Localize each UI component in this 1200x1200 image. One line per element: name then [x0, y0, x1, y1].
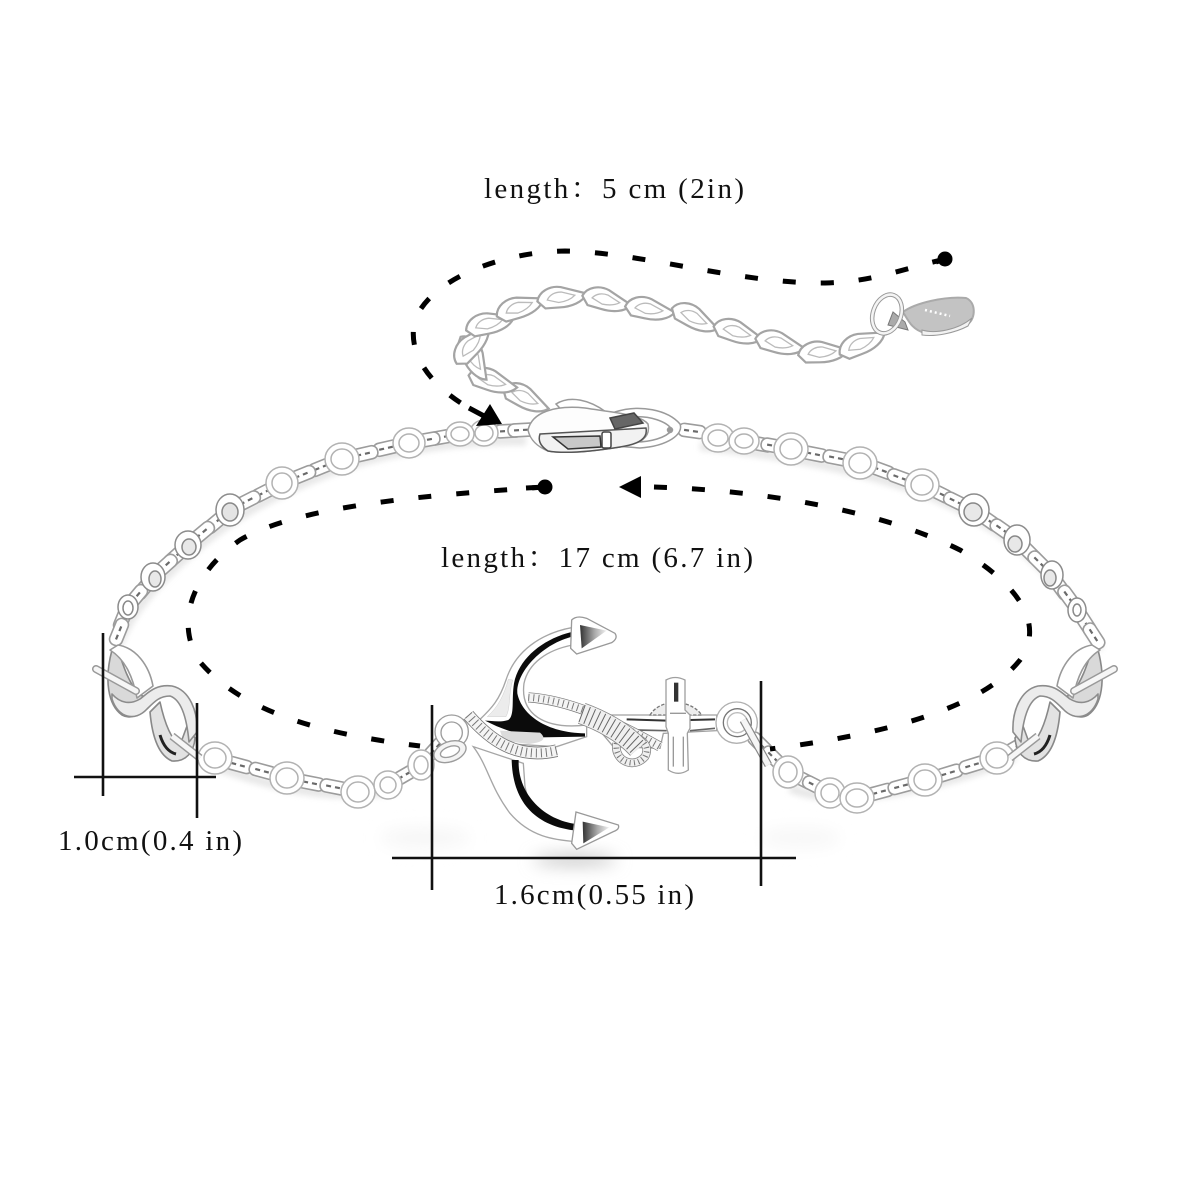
- chain shadow: [118, 441, 1100, 797]
- heart charm: [867, 290, 974, 338]
- anchor end ring: [716, 702, 768, 765]
- anchor rope: [468, 697, 660, 763]
- anchor shaft and cross: [587, 677, 717, 773]
- soft shadows under anchor: [380, 828, 840, 866]
- bracelet chain: upper right: [677, 423, 1107, 651]
- dashed arrow: extender length: [413, 251, 952, 426]
- label: extender length: length：5 cm (2in): [484, 173, 744, 205]
- bracelet chain: upper left: [108, 420, 536, 647]
- lobster clasp: [528, 399, 681, 452]
- bracelet chain: lower right: [746, 730, 1030, 813]
- label: infinity width: 1.0cm(0.4 in): [58, 825, 242, 857]
- anchor upper fluke: [480, 617, 616, 747]
- anchor pendant: [431, 617, 768, 849]
- label: anchor width: 1.6cm(0.55 in): [494, 879, 694, 911]
- dashed arrow: bracelet length: [188, 476, 1030, 749]
- anchor lower fluke: [473, 747, 619, 849]
- bracelet chain: lower left: [198, 733, 450, 808]
- dimension lines: anchor width: [392, 681, 796, 890]
- label: bracelet length: length：17 cm (6.7 in): [441, 542, 753, 574]
- extender chain: [448, 283, 889, 418]
- dimension lines: infinity width: [74, 633, 216, 818]
- anchor left ring: [431, 715, 469, 767]
- right infinity charm: [1010, 645, 1114, 761]
- left infinity charm: [96, 645, 200, 761]
